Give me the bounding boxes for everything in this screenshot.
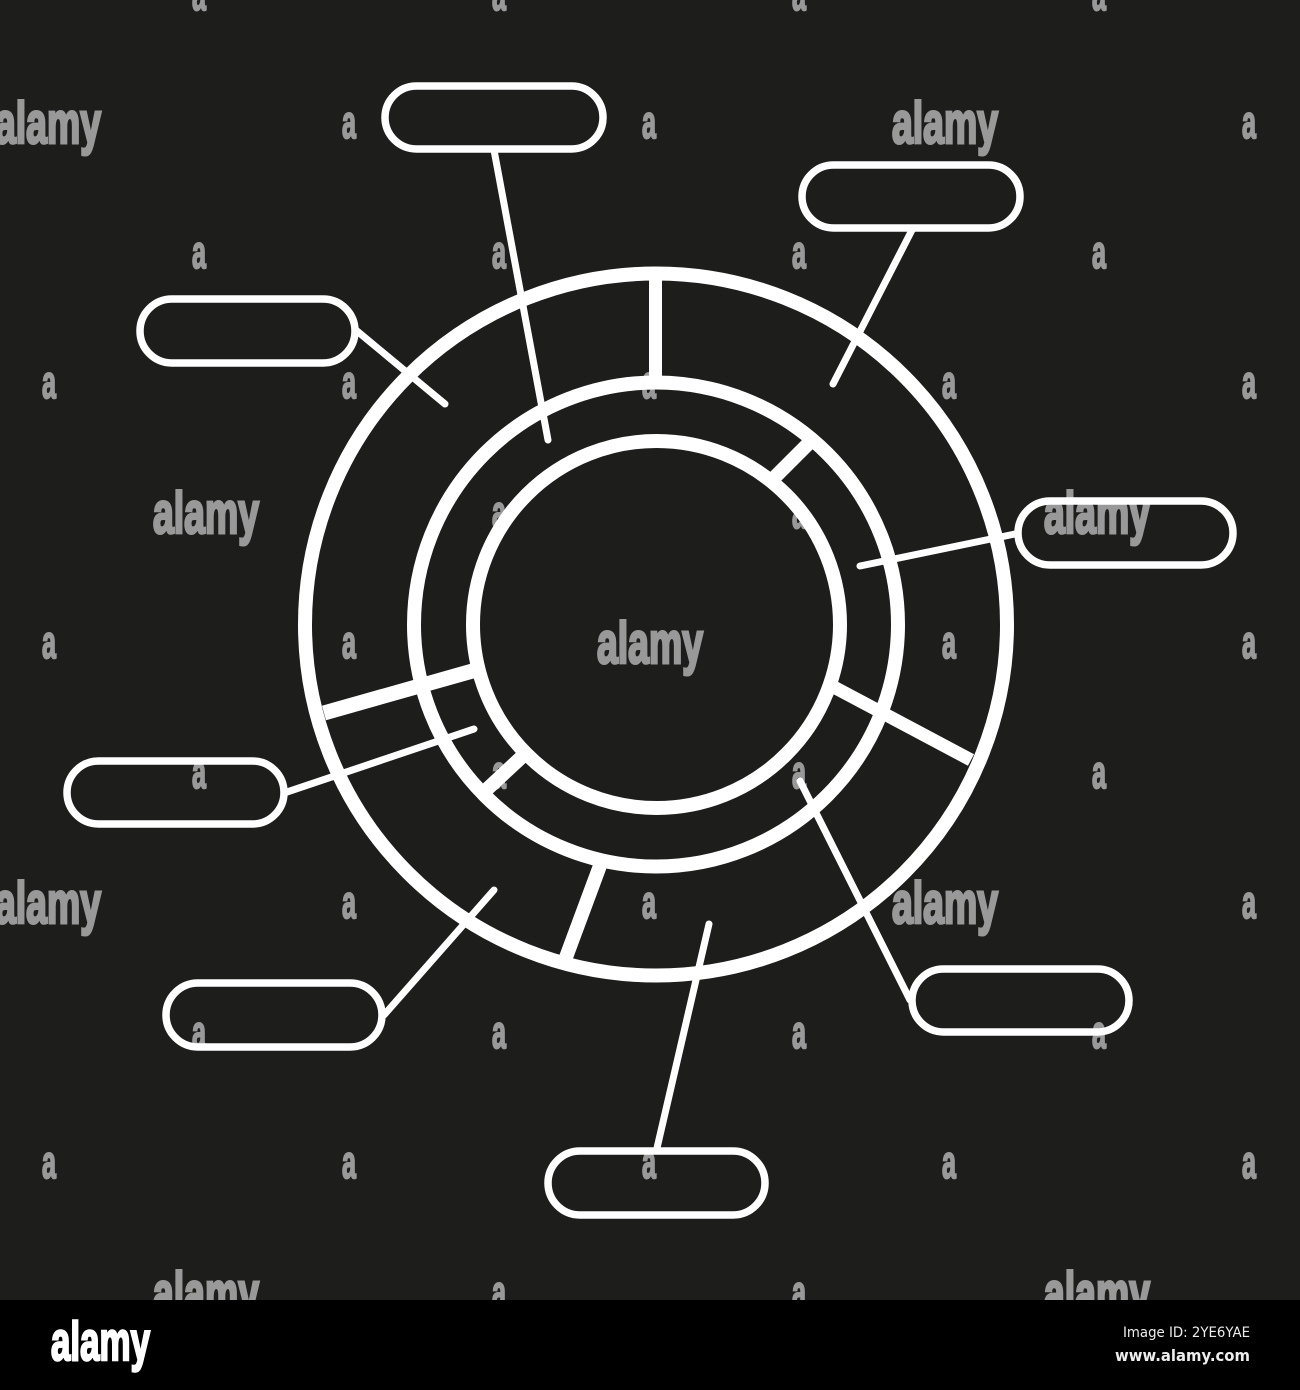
callout: bottom left: [166, 890, 494, 1047]
watermark pattern: a: [342, 96, 356, 148]
circular diagram: [305, 274, 1007, 976]
watermark pattern: a: [942, 356, 956, 408]
watermark pattern: a: [42, 356, 56, 408]
watermark pattern: a: [492, 486, 506, 538]
middle ring: [414, 382, 898, 866]
watermark pattern: a: [342, 876, 356, 928]
watermark pattern: a: [342, 1136, 356, 1188]
watermark pattern: a: [1092, 1006, 1106, 1058]
watermark pattern: alamy: [892, 871, 998, 936]
watermark pattern: a: [942, 1136, 956, 1188]
watermark pattern: a: [642, 876, 656, 928]
footer bar: [0, 1300, 1300, 1390]
watermark pattern: a: [1242, 1136, 1256, 1188]
callout: right: [860, 501, 1233, 566]
watermark pattern: a: [492, 1006, 506, 1058]
callout labels: [67, 86, 1233, 1215]
watermark pattern: a: [792, 226, 806, 278]
callout: upper left: [140, 299, 445, 404]
watermark pattern: alamy: [153, 481, 259, 546]
watermark pattern: a: [1242, 356, 1256, 408]
watermark pattern: a: [792, 746, 806, 798]
watermark pattern: a: [492, 746, 506, 798]
watermark pattern: a: [342, 616, 356, 668]
watermark pattern: a: [192, 746, 206, 798]
inner ring: [473, 441, 840, 808]
watermark pattern: a: [642, 96, 656, 148]
watermark pattern: a: [192, 1006, 206, 1058]
watermark pattern: a: [42, 1136, 56, 1188]
outer ring: [305, 274, 1007, 976]
watermark pattern: alamy: [1044, 481, 1150, 546]
callout: left: [67, 729, 474, 824]
callout: top left: [385, 86, 603, 440]
watermark pattern: a: [192, 226, 206, 278]
watermark pattern: alamy: [1044, 1261, 1150, 1326]
footer logo: alamy: [51, 1310, 150, 1372]
watermark pattern: a: [492, 226, 506, 278]
watermark pattern: a: [1092, 226, 1106, 278]
watermark pattern: a: [642, 1136, 656, 1188]
watermark pattern: a: [792, 486, 806, 538]
watermark pattern: a: [1092, 746, 1106, 798]
watermark pattern: a: [792, 1006, 806, 1058]
watermark pattern: a: [342, 356, 356, 408]
watermark pattern: a: [42, 616, 56, 668]
watermark pattern: a: [1242, 876, 1256, 928]
watermark pattern: a: [792, 1266, 806, 1318]
image id: Image ID: 2YE6YAE: [1123, 1325, 1250, 1341]
watermark pattern: alamy: [892, 91, 998, 156]
watermark pattern: a: [1242, 96, 1256, 148]
watermark pattern: a: [642, 356, 656, 408]
watermark pattern: a: [1242, 616, 1256, 668]
callout: top right: [802, 165, 1020, 384]
watermark pattern: a: [942, 616, 956, 668]
segment dividers: [324, 278, 971, 960]
watermark pattern: a: [492, 1266, 506, 1318]
callout: bottom: [548, 924, 765, 1215]
watermark pattern: alamy: [597, 611, 703, 676]
website: www.alamy.com: [1115, 1346, 1250, 1365]
watermark pattern: alamy: [153, 1261, 259, 1326]
callout: bottom right: [800, 781, 1129, 1032]
